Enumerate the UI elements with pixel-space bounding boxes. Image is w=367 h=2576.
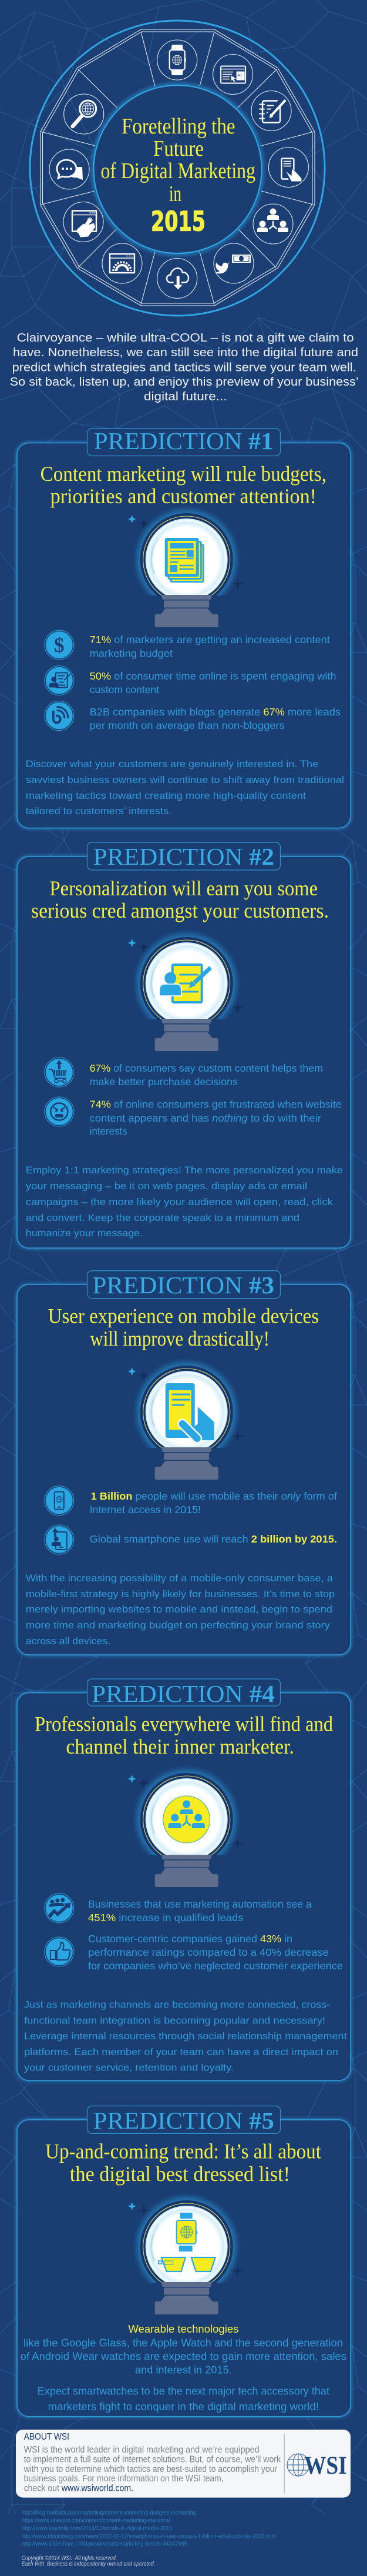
body text 3 — [26, 1573, 335, 1647]
body text 1: savviest business owners will continue to shift away from traditional — [26, 774, 344, 785]
panel: prediction 2 — [17, 842, 351, 1248]
title — [101, 114, 255, 237]
stat: 50%: 50% of consumer time online is spent engaging with — [90, 670, 336, 682]
body text 1: Discover what your customers are genuinely interested in. The — [26, 758, 318, 770]
crystal ball with phone icon — [128, 1362, 244, 1480]
stat: 451% — [45, 1893, 312, 1923]
prediction 5 label: PREDICTION #5 — [93, 2107, 274, 2134]
source links: http://www.saydaily.com/2014/11/trends-in-digital-media-2015 — [22, 2525, 173, 2532]
stat: 74%: 74% of online consumers get frustrated when website — [90, 1098, 342, 1110]
title: of Digital Marketing — [101, 159, 255, 183]
body text 1: marketing tactics toward creating more high-quality content — [26, 790, 306, 801]
source links: http://www.slideshare.net/JakeAtwood1/marketing-trends-34347995 — [22, 2541, 187, 2548]
about text: with you to determine which tactics are best-suited to accomplish your — [23, 2464, 277, 2474]
source links: http://www.bloomberg.com/news/2012-10-17/smartphones-in-use-surpass-1-billion-will-double-by-2015.html — [22, 2532, 276, 2540]
panel: prediction 5 — [17, 2106, 351, 2417]
intro paragraph — [10, 331, 359, 403]
stat: 43%: for companies who’ve neglected customer experience — [88, 1960, 343, 1972]
stat: 74%: content appears and has nothing to do with their — [90, 1112, 321, 1124]
body text 4: Leverage internal resources through social relationship management — [24, 2030, 347, 2042]
body text 2: and convert. Keep the corporate speak to a minimum and — [26, 1212, 299, 1223]
about text: check out www.wsiworld.com. — [24, 2483, 133, 2494]
icon: chat bubbles — [49, 149, 89, 189]
stat: 71%: marketing budget — [90, 648, 173, 660]
body text 3: mobile-first strategy is highly likely for businesses. It’s time to stop — [26, 1588, 335, 1600]
icon: phone and hand — [268, 147, 308, 187]
body text 2 — [26, 1165, 343, 1239]
prediction 4 heading — [35, 1712, 333, 1758]
wearable technologies text: of Android Wear watches are expected to gain more attention, sales — [21, 2350, 346, 2363]
about text: to implement a full suite of Internet solutions. But, of course, we’ll work — [24, 2454, 281, 2464]
about text: WSI is the world leader in digital marketing and we’re equipped — [24, 2445, 260, 2455]
stat: 43%: Customer-centric companies gained 43% in — [88, 1933, 292, 1945]
panel: prediction 4 — [17, 1679, 351, 2080]
prediction 4 heading: channel their inner marketer. — [66, 1735, 294, 1758]
stat: 451%: 451% increase in qualified leads — [88, 1912, 244, 1923]
prediction 5 heading: Up-and-coming trend: It’s all about — [45, 2139, 321, 2163]
source links: https://www.onespot.com/content/content-marketing-statistics/ — [22, 2517, 170, 2524]
source links: http://blog.hubspot.com/marketing/content-marketing-budgets-increasing — [22, 2510, 196, 2517]
icon: ad browser — [213, 54, 253, 94]
icon: browser and gear — [102, 243, 142, 283]
dodecagon frame — [40, 29, 315, 306]
stat: 2 billion: Global smartphone use will reach 2 billion by 2015. — [90, 1533, 337, 1545]
icon: notebook and pencil — [251, 91, 291, 131]
title: Foretelling the — [122, 114, 235, 139]
panel: prediction 1 — [17, 427, 351, 828]
panel: prediction 3 — [17, 1271, 351, 1655]
body text 3: merely importing websites to mobile and instead, begin to spend — [26, 1604, 332, 1615]
stat: 67%: B2B companies with blogs generate 67% more leads — [90, 706, 341, 718]
about heading: ABOUT WSI — [24, 2432, 69, 2442]
stat: 71%: $ — [54, 634, 65, 657]
prediction 4 label: PREDICTION #4 — [92, 1680, 275, 1707]
body text 4: your customer service, retention and loyalty. — [24, 2062, 234, 2073]
body text 4 — [24, 1999, 347, 2073]
WSI logo: WSI — [304, 2452, 347, 2480]
body text 3: more time and marketing budget on perfecting your brand story — [26, 1620, 331, 1631]
stat: 67% of consumers: make better purchase decisions — [90, 1076, 238, 1088]
wearable technologies text: Expect smartwatches to be the next major tech accessory that — [38, 2385, 329, 2397]
intro paragraph: Clairvoyance – while ultra-COOL – is not a gift we claim to — [17, 331, 354, 344]
intro paragraph: So sit back, listen up, and enjoy this preview of your business’ — [10, 375, 359, 389]
body text 2: your messaging – be it on web pages, display ads or email — [26, 1180, 307, 1192]
prediction 2 heading: Personalization will earn you some — [49, 876, 318, 900]
prediction 3 label: PREDICTION #3 — [92, 1272, 274, 1299]
title: 2015 — [151, 206, 206, 237]
stat: 67% — [45, 701, 341, 731]
prediction 3 heading — [48, 1304, 319, 1350]
stat: 50% — [45, 665, 336, 695]
copyright: Copyright ©2014 WSI. All rights reserved. — [22, 2554, 117, 2561]
source links — [22, 2510, 276, 2548]
stat: 451%: Businesses that use marketing automation see a — [88, 1898, 312, 1910]
wearable technologies text — [21, 2323, 346, 2413]
body text 2: humanize your message. — [26, 1227, 143, 1239]
prediction 3 heading: will improve drastically! — [90, 1327, 270, 1350]
body text 1: tailored to customers’ interests. — [26, 805, 171, 817]
wearable technologies text: and interest in 2015. — [135, 2364, 232, 2376]
stat: 71% — [45, 630, 330, 660]
body text 4: platforms. Each member of your team can have a direct impact on — [24, 2046, 338, 2058]
prediction 4 heading: Professionals everywhere will find and — [35, 1712, 333, 1735]
body text 4: functional team integration is becoming popular and necessary! — [24, 2015, 325, 2026]
copyright — [22, 2554, 155, 2568]
stat: 67%: per month on average than non-bloggers — [90, 720, 285, 731]
crystal ball with documents icon — [128, 510, 244, 627]
stat: 43% — [45, 1933, 343, 1972]
stat: 67% of consumers: 67% of consumers say custom content helps them — [90, 1062, 323, 1074]
icon: magnifier and globe — [64, 94, 104, 134]
stat: 67% of consumers — [45, 1058, 323, 1088]
prediction 2 heading: serious cred amongst your customers. — [31, 899, 329, 922]
about text: business goals. For more information on the WSI team, — [24, 2474, 224, 2484]
wearable technologies text: Wearable technologies — [128, 2323, 238, 2335]
hero wheel — [30, 21, 325, 316]
prediction 5 heading — [45, 2139, 321, 2186]
wearable technologies text: marketers fight to conquer in the digital marketing world! — [48, 2400, 319, 2413]
crystal ball with team icon — [128, 1769, 244, 1887]
stat: 71%: 71% of marketers are getting an increased content — [90, 634, 330, 645]
stat: 43%: performance ratings compared to a 40% decrease — [88, 1946, 329, 1958]
prediction 1 heading — [41, 462, 326, 508]
outer glowing ring — [30, 21, 325, 316]
stat: 1 billion: Internet access in 2015! — [90, 1504, 201, 1516]
title: Future — [153, 136, 204, 161]
body text 2: campaigns – the more likely your audience will open, read, click — [26, 1196, 334, 1207]
stat: 1 billion: 1 Billion people will use mobile as their only form of — [91, 1490, 337, 1502]
copyright: Each WSI Business is independently owned and operated. — [22, 2561, 155, 2568]
WSI logo — [287, 2452, 347, 2480]
prediction 5 heading: the digital best dressed list! — [70, 2162, 290, 2186]
prediction 2 label: PREDICTION #2 — [93, 843, 274, 870]
crystal ball with watch and glasses icon — [128, 2197, 244, 2314]
intro paragraph: have. Nonetheless, we can still see into the digital future and — [13, 346, 358, 359]
body text 4: Just as marketing channels are becoming more connected, cross- — [24, 1999, 330, 2010]
prediction 3 heading: User experience on mobile devices — [48, 1304, 319, 1328]
center disc — [93, 84, 263, 255]
wearable technologies text: like the Google Glass, the Apple Watch and the second generation — [23, 2336, 343, 2348]
intro paragraph: digital future... — [144, 390, 227, 403]
icon: twitter bird and money — [214, 243, 254, 283]
panel: about WSI — [16, 2430, 351, 2498]
icon: touch browser — [63, 202, 103, 242]
intro paragraph: predict which strategies and tactics will serve your team well. — [12, 361, 356, 374]
prediction 1 label: PREDICTION #1 — [94, 427, 274, 454]
prediction 1 heading: Content marketing will rule budgets, — [41, 462, 326, 486]
icon: network of people — [253, 204, 293, 244]
icon: cloud download — [157, 259, 197, 299]
body text 1 — [26, 758, 344, 817]
body text 2: Employ 1:1 marketing strategies! The more personalized you make — [26, 1165, 343, 1176]
stat: 74% — [45, 1097, 342, 1137]
icon: smartwatch — [157, 40, 197, 80]
stat: 50%: custom content — [90, 684, 159, 695]
stat: 1 billion — [45, 1486, 337, 1516]
about text — [23, 2445, 281, 2494]
stat: 74%: interests — [90, 1125, 127, 1137]
title: in — [169, 182, 181, 206]
body text 3: With the increasing possibility of a mobile-only consumer base, a — [26, 1573, 334, 1584]
crystal ball with personalized document icon — [128, 934, 244, 1051]
stat: 2 billion — [45, 1525, 337, 1554]
prediction 1 heading: priorities and customer attention! — [50, 484, 317, 508]
body text 3: across all devices. — [26, 1635, 110, 1647]
prediction 2 heading — [31, 876, 329, 922]
